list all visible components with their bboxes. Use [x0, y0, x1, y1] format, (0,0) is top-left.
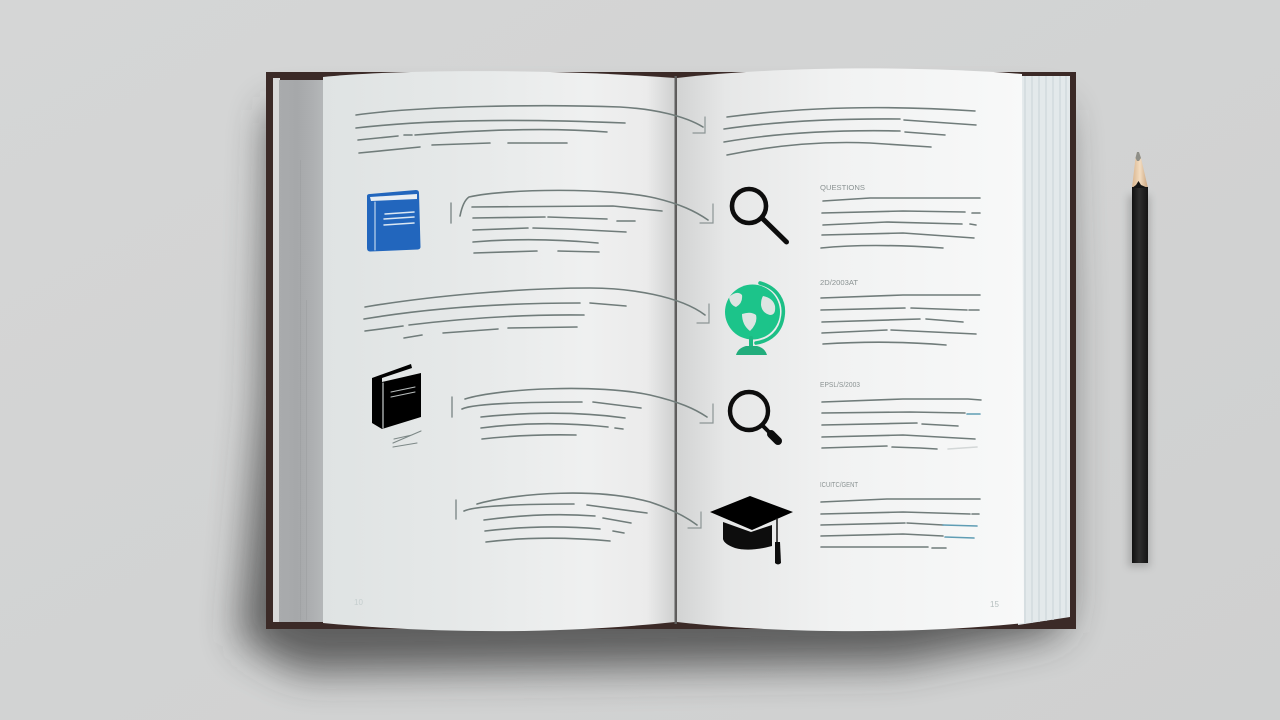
text block: right 1: QUESTIONS	[820, 183, 865, 192]
text block: right 4: ICUITC/GENT	[820, 480, 858, 489]
right page	[677, 68, 1024, 631]
icon: graduation cap	[710, 496, 793, 564]
page number: right: 15	[990, 600, 999, 609]
book	[266, 68, 1076, 631]
text block: left 5 with arrow	[456, 493, 701, 542]
right page content	[354, 108, 999, 609]
text block: right 4	[820, 480, 980, 548]
book cover	[266, 72, 1076, 629]
pencil	[1128, 152, 1150, 567]
text block: right 3: EPSL/S/2003	[820, 380, 860, 389]
text block: right 3	[820, 380, 981, 449]
text block: left 4 with arrow	[452, 388, 713, 439]
icon: green globe	[725, 283, 783, 355]
icon: magnifier 1	[732, 189, 786, 242]
left page content	[356, 106, 713, 542]
text block: right 2	[820, 278, 980, 345]
left fore-edge of pages	[273, 78, 325, 622]
left page	[323, 71, 675, 631]
text block: left 1 with arrow	[356, 106, 705, 153]
text block: left 3 with arrow	[364, 288, 709, 338]
right fore-edge of pages	[1018, 76, 1070, 625]
icon: magnifier 2	[730, 392, 778, 441]
text block: right top	[724, 108, 976, 155]
page number: left: 10	[354, 598, 363, 607]
book drop shadow	[240, 110, 1066, 672]
spine	[674, 76, 677, 624]
icon: blue book	[367, 190, 420, 252]
text block: right 2: 2D/2003AT	[820, 278, 858, 287]
icon: black book	[372, 364, 421, 447]
text block: right 1	[820, 183, 980, 248]
text block: left 2 with arrow	[451, 190, 713, 253]
